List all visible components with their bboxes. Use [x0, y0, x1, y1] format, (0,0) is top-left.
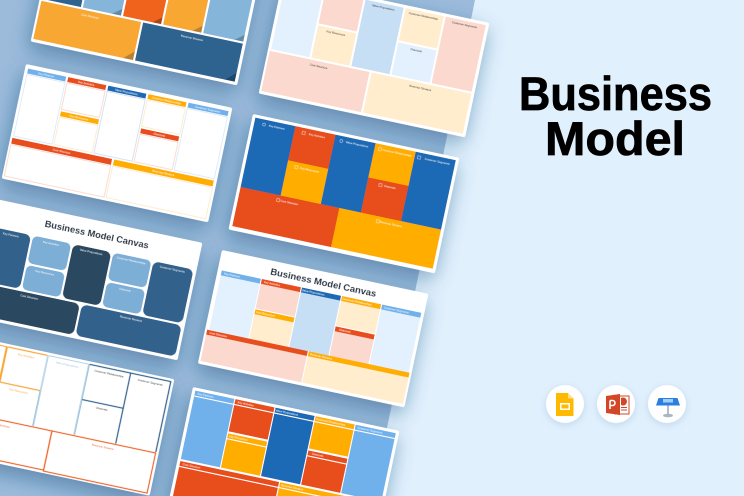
cell: key activities — [229, 399, 275, 440]
cell: key resources: Key Resources — [326, 29, 346, 37]
cell: value propositions — [62, 244, 111, 306]
cell: revenue streams — [135, 22, 243, 82]
cell: customer relationships: Customer Relationships — [382, 148, 413, 158]
cell: revenue streams: Revenue Streams — [281, 483, 304, 492]
card: saturated canvas with headers (bottom) — [169, 387, 399, 496]
cell: customer segments — [203, 0, 258, 42]
cell: key activities — [0, 347, 48, 391]
cell: key activities: Key Activities — [78, 80, 95, 87]
cell: key resources: Key Resources — [9, 387, 29, 395]
cell: key activities — [319, 0, 364, 31]
cell: customer segments: Customer Segments — [137, 378, 164, 387]
cell: key resources — [249, 309, 295, 347]
cell: channels: Channels — [95, 406, 108, 412]
cell: channels — [75, 400, 123, 443]
cell: key activities — [288, 126, 336, 169]
cell: key resources — [221, 433, 267, 476]
cell: channels: Channels — [311, 452, 324, 458]
cell: key partners: Key Partners — [224, 271, 241, 279]
cell: channels — [301, 450, 347, 493]
cell: cost structure — [4, 138, 112, 197]
icon: Google Slides — [546, 385, 584, 423]
cell: key resources: Key Resources — [256, 310, 276, 318]
cell: revenue streams — [302, 351, 410, 404]
cell: customer relationships — [108, 253, 152, 288]
cell: key resources: Key Resources — [300, 166, 320, 174]
cell: customer segments: Customer Segments — [452, 20, 478, 29]
cell: customer segments — [174, 103, 229, 179]
cell: key activities: Key Activities — [17, 352, 35, 360]
card title: Business Model Canvas — [44, 219, 150, 252]
card: pastel canvas with title and headers — [198, 250, 428, 407]
cell: customer segments — [369, 304, 421, 372]
cell: revenue streams: Revenue Streams — [380, 220, 403, 229]
cell: key partners: Key Partners — [197, 392, 214, 399]
cell: value propositions: Value Propositions — [372, 3, 396, 12]
diagonal blue background band — [0, 0, 475, 496]
cell: channels: Channels — [384, 184, 397, 190]
cell: key resources: Key Resources — [69, 114, 89, 122]
cell: key resources: Key Resources — [35, 269, 55, 277]
cell: key partners: Key Partners — [3, 231, 20, 239]
card: saturated blue red amber canvas — [228, 114, 459, 273]
cell: channels — [329, 326, 375, 364]
cell: revenue streams: Revenue Streams — [120, 314, 143, 323]
cell: channels — [361, 177, 408, 221]
card: sticky-note canvas (top left) — [31, 0, 261, 85]
cell: value propositions: Value Propositions — [301, 288, 325, 297]
cell: key resources: Key Resources — [229, 434, 249, 442]
cell: customer relationships — [368, 143, 416, 186]
cell: key activities: Key Activities — [308, 132, 326, 140]
cell: channels — [134, 128, 179, 170]
cell: cost structure: Cost Structure — [52, 147, 71, 155]
cell: cost structure: Cost Structure — [182, 462, 201, 470]
cell: customer segments — [142, 261, 194, 323]
cell: customer segments: Customer Segments — [195, 105, 221, 114]
cell: key partners — [241, 118, 295, 196]
cell: cost structure — [33, 1, 141, 60]
cell: key partners — [14, 69, 66, 144]
title: Business Model: Business — [519, 67, 712, 120]
card: pastel canvas (top right) — [259, 0, 489, 137]
cell: value propositions — [321, 135, 376, 213]
cell: customer relationships — [309, 416, 355, 457]
cell: key resources — [281, 160, 328, 204]
cell: customer relationships — [336, 296, 381, 334]
cell: channels: Channels — [153, 132, 166, 138]
cell: value propositions — [34, 356, 89, 435]
cell: revenue streams — [363, 72, 471, 134]
cell: channels: Channels — [410, 47, 423, 54]
cell: customer segments: Customer Segments — [424, 157, 451, 166]
cell: cost structure — [0, 283, 80, 335]
cell: channels: Channels — [119, 287, 132, 293]
cell: key partners: Key Partners — [38, 71, 55, 79]
cell: value propositions: Value Propositions — [55, 360, 79, 369]
cell: customer relationships — [75, 364, 131, 443]
cell: value propositions — [289, 287, 341, 355]
cell: revenue streams — [75, 304, 182, 357]
cell: key partners — [0, 227, 31, 289]
cell: key activities — [27, 236, 71, 271]
cell: customer relationships: Customer Relationships — [342, 297, 373, 307]
cell: key partners — [0, 339, 6, 417]
title: Business Model: Model — [545, 112, 685, 165]
cell: value propositions — [94, 86, 146, 161]
cell: customer segments — [341, 425, 396, 496]
cell: value propositions — [123, 0, 176, 24]
cell: revenue streams: Revenue Streams — [91, 443, 115, 451]
cell: key activities: Key Activities — [264, 280, 281, 287]
cell: key resources — [0, 382, 40, 426]
cell: channels: Channels — [339, 328, 352, 334]
cell: revenue streams — [106, 159, 214, 219]
title: Business Model — [519, 67, 712, 165]
cell: cost structure: Cost Structure — [81, 12, 100, 20]
cell: revenue streams: Revenue Streams — [409, 84, 432, 92]
icon: Keynote — [648, 385, 686, 423]
card title: Business Model Canvas — [269, 267, 377, 300]
cell: key activities — [256, 279, 301, 317]
cell: key activities: Key Activities — [42, 240, 60, 247]
cell: revenue streams: Revenue Streams — [310, 352, 333, 361]
cell: customer relationships: Customer Relationships — [408, 11, 439, 21]
cell: customer relationships: Customer Relationships — [316, 417, 346, 427]
cell: cost structure: Cost Structure — [309, 62, 328, 70]
cell: key resources — [311, 25, 356, 66]
cell: key partners — [43, 0, 95, 7]
cell: customer relationships: Customer Relationships — [94, 369, 125, 379]
cell: value propositions: Value Propositions — [275, 408, 299, 417]
cell: key partners: Key Partners — [268, 124, 286, 131]
card: rounded navy canvas — [0, 199, 202, 360]
cell: customer segments — [401, 152, 456, 230]
card: outline colour canvas — [0, 335, 174, 496]
cell: value propositions: Value Propositions — [345, 140, 369, 149]
cell: cost structure — [232, 187, 339, 247]
cell: cost structure: Cost Structure — [280, 199, 299, 206]
cell: revenue streams: Revenue Streams — [152, 169, 175, 177]
cell: key partners — [181, 391, 234, 467]
cell: value propositions — [351, 0, 404, 74]
cell: key activities: Key Activities — [237, 400, 255, 408]
cell: channels — [391, 42, 436, 83]
cell: cost structure — [0, 410, 52, 470]
cell: key activities — [83, 0, 136, 16]
cell: revenue streams — [272, 482, 381, 496]
cell: key partners — [271, 0, 323, 57]
cell: value propositions — [261, 408, 315, 484]
cell: customer segments — [432, 17, 486, 92]
cell: customer relationships: Customer Relationships — [116, 255, 147, 266]
cell: key activities — [61, 77, 106, 117]
cell: customer relationships — [142, 94, 187, 134]
cell: key partners — [209, 270, 261, 338]
cell: cost structure — [200, 330, 308, 382]
cell: customer relationships — [399, 8, 444, 49]
cell: revenue streams: Revenue Streams — [181, 34, 204, 42]
icon: PowerPoint — [597, 385, 635, 423]
cell: value propositions: Value Propositions — [79, 248, 103, 256]
cell: customer segments — [116, 373, 171, 452]
cell: customer relationships — [163, 0, 216, 33]
cell: revenue streams — [43, 431, 156, 493]
cell: key resources — [54, 111, 99, 153]
cell: customer segments: Customer Segments — [159, 265, 186, 274]
cell: revenue streams — [331, 208, 441, 269]
cell: customer segments: Customer Segments — [383, 305, 410, 315]
cell: value propositions: Value Propositions — [115, 88, 139, 96]
cell: cost structure — [172, 461, 279, 496]
cell: key resources — [22, 265, 65, 297]
cell: customer segments: Customer Segments — [357, 426, 383, 435]
card: outlined canvas with coloured headers — [2, 64, 232, 222]
cell: channels — [102, 282, 145, 314]
cell: cost structure: Cost Structure — [209, 331, 228, 338]
cell: cost structure — [261, 51, 370, 112]
cell: customer relationships: Customer Relationships — [152, 95, 182, 106]
cell: cost structure: Cost Structure — [20, 293, 39, 301]
